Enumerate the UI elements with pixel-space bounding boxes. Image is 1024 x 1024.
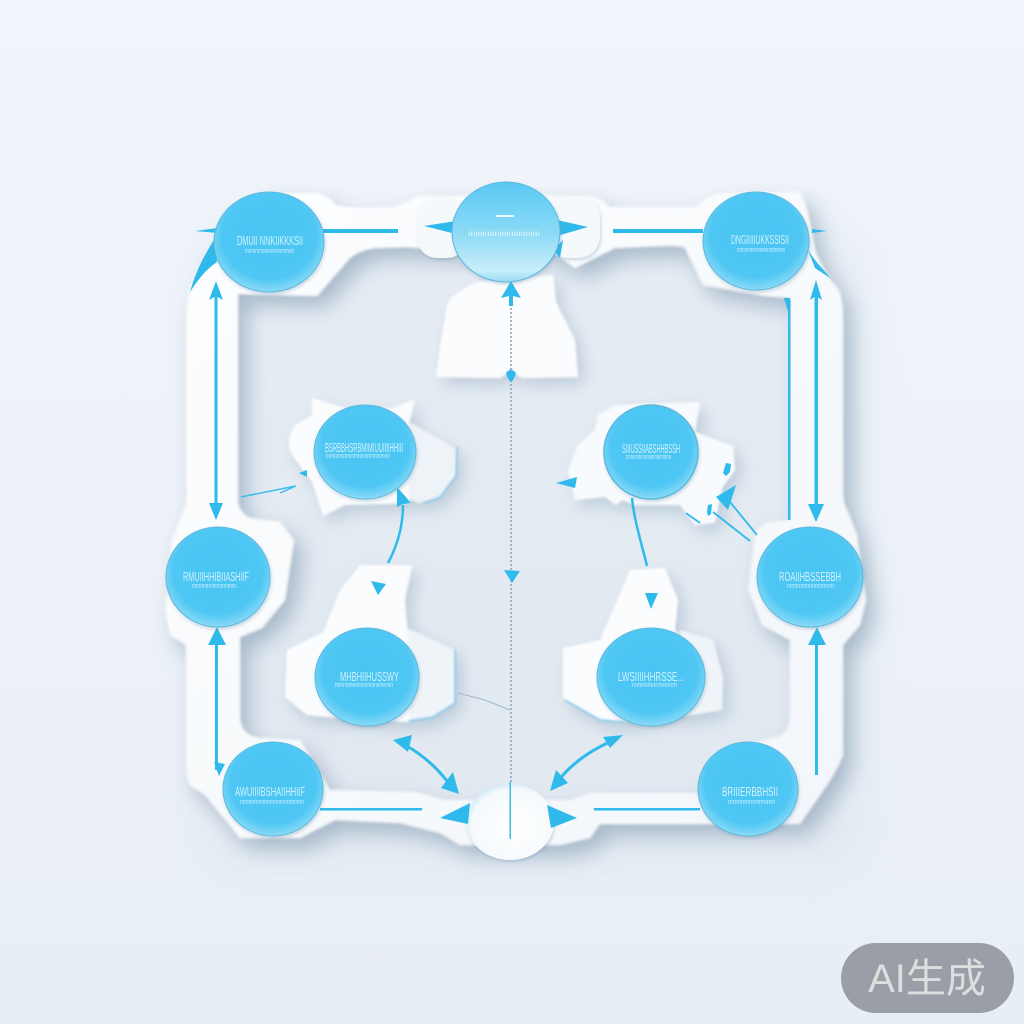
node: left: mmnnmnnnmnnmm: [192, 581, 236, 590]
arrows: inner upper left: [241, 470, 411, 595]
arrow: top centre right spike: [557, 220, 588, 236]
node: lower right inner: mmnnmnnnmnnm: [632, 680, 677, 689]
arrow: right lower: [808, 627, 826, 775]
node: left: [166, 527, 270, 627]
node: top left: [214, 192, 324, 292]
node: lower right inner: [597, 628, 705, 726]
badge: AI generated: AI生成: [868, 957, 986, 1001]
node: bottom right: mmnnmnnnmnnm: [728, 797, 775, 806]
panel: paper behind upper left node: [289, 398, 457, 516]
panel: paper behind lower left node: [285, 565, 455, 722]
label: LWSIIIIHHRSSE...: [618, 669, 684, 684]
arrow: lower right double curved: [550, 735, 623, 791]
soft ambient shadow under diagram: [205, 225, 865, 865]
node: bottom right: [698, 742, 798, 836]
node: top right: mmnnmnnnnmnnmmnn: [737, 245, 785, 254]
arrow: up into top node: [501, 281, 521, 306]
arrow: left spike: [440, 803, 470, 824]
node: upper left inner: mmnnmnnnnmnnmmnnmmnn: [326, 451, 390, 460]
panel: paper behind upper right node: [568, 402, 735, 525]
center dashed connector: [510, 300, 512, 790]
arrows: frame connectors: [190, 220, 830, 810]
node: upper right inner: SIIIUSSIIABSHHBSSH: [622, 441, 680, 456]
arrow: right upper double: [808, 280, 824, 522]
arrow: lower left double curved: [393, 735, 459, 794]
arrow: top centre left spike: [424, 221, 456, 234]
thin grey branch line: [458, 693, 510, 710]
arrow: left lower double: [208, 627, 226, 776]
panel: white frame track: [165, 192, 866, 845]
node: bottom left: [223, 742, 323, 836]
label: AWUIIIIBSHAIIHHIIF: [235, 784, 305, 799]
label: [496, 215, 514, 217]
vertical line in white node: [510, 782, 511, 839]
node: right: [757, 527, 863, 627]
label: DMUII NNKIIKKKSII: [237, 233, 303, 248]
node: upper left inner: BSRBBHSRBMIMIUUIIIIHHIII: [325, 440, 403, 455]
marker: centre down triangle: [504, 570, 520, 583]
marker on centre line: [506, 370, 516, 382]
panel: lens collar top centre: [417, 196, 600, 258]
panel: paper behind lower right node: [563, 568, 723, 722]
arrow: right spike: [547, 805, 577, 828]
arrows: inner upper right: [556, 463, 757, 609]
node: lower left inner: mmnnmnnnnmnmnnmmnn: [335, 680, 393, 689]
node: top left: mmnnmnnnnmnnmmnn: [245, 246, 294, 255]
node: top centre: [452, 182, 560, 282]
node: upper right inner: mmnnmnnnnmnnmmnn: [626, 452, 671, 461]
label: BRIIIERBBHSII: [722, 784, 778, 799]
node: right: mmnnmnnnmnnmm: [787, 581, 834, 590]
node: upper left inner: [314, 405, 416, 499]
node: top right: [703, 192, 809, 290]
arrow: left upper double: [209, 281, 223, 520]
label: MHBHIIHUSSWY: [340, 669, 399, 684]
panel: shirt shape under top node: [436, 275, 578, 378]
node: lower left inner: [315, 628, 419, 726]
node: bottom left: mmnnmnnnnmnnmnnmmnn: [240, 797, 304, 806]
node: bottom centre white: [440, 782, 577, 860]
label: ROAIIHBSSEBBH: [779, 569, 841, 584]
badge: AI generated: [841, 943, 1014, 1013]
node: upper right inner: [604, 405, 698, 499]
label: DNGIIIIIUKKSSISII: [731, 232, 789, 247]
label: RMUIIHHIBIIASHIIF: [183, 569, 249, 584]
node: top centre: iiiiiiiiiiiiiiiiiiiiiiiiiiiiii: [468, 229, 540, 238]
